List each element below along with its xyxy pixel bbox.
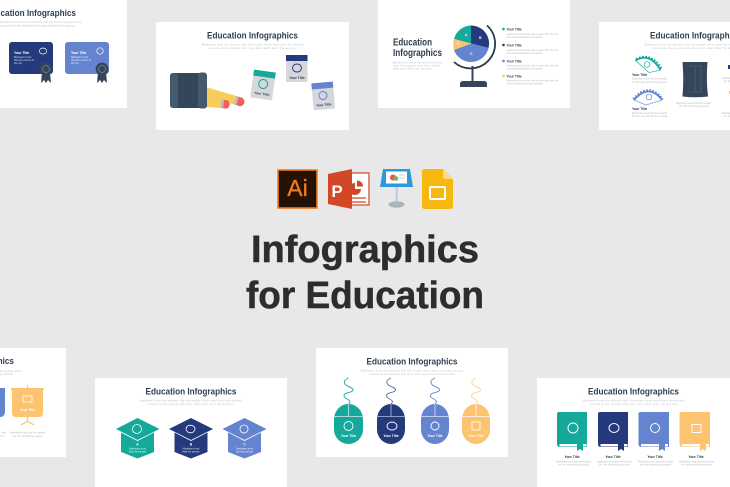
fan label: blue — [632, 107, 668, 118]
fan label: teal: Your Title — [632, 73, 647, 77]
legend: Marketers trust that the people that the the — [506, 78, 559, 82]
cap: blue: C — [243, 442, 246, 446]
panel: presentation boards — [0, 348, 66, 457]
panel heading: sharpener: Education Infographics — [207, 30, 298, 40]
panel description: certificates — [0, 20, 82, 28]
cap: navy: Marketers trust — [183, 448, 200, 450]
cap: teal: hold the person — [129, 450, 147, 454]
mouse: navy: Your Title — [383, 434, 399, 438]
fan label: blue: Your Title — [632, 107, 647, 111]
panel description: globe: that the people that they never — [393, 64, 440, 68]
board captions — [0, 430, 46, 438]
globe: A — [465, 33, 468, 37]
mouse: yellow — [462, 378, 490, 444]
book label: navy: for the something people — [599, 462, 630, 466]
cap: blue: hold the person — [236, 450, 254, 454]
card: teal tilted — [250, 70, 276, 100]
cap: blue — [222, 418, 266, 458]
book label: yellow: Marketers trust that the people — [679, 460, 714, 464]
panel heading: caps: Education Infographics — [146, 386, 236, 396]
cap: teal: Marketers trust — [129, 448, 146, 450]
panel description: books: around at the people that they dont want their the account — [590, 402, 678, 406]
panel description: fans — [645, 42, 730, 50]
panel heading: globe: Education — [393, 38, 432, 48]
sharpener caption: Marketers trust that the people — [676, 101, 712, 105]
card: blue certificate: Your Title — [71, 51, 86, 55]
card: navy certificate: Your Title — [14, 51, 29, 55]
sharpener front — [682, 62, 708, 97]
pie: yellow — [453, 39, 471, 50]
pencil short — [206, 97, 230, 109]
cap: navy — [169, 418, 213, 458]
card: blue certificate — [65, 42, 109, 83]
board captions: Marketers trust that the people — [10, 430, 46, 434]
pencil long — [206, 87, 244, 106]
panel heading: globe — [393, 38, 442, 59]
panel: sharpener and pencils — [156, 22, 349, 130]
book label: blue — [638, 455, 674, 466]
mouse: navy — [377, 378, 405, 444]
book label: blue: Your Title — [647, 455, 663, 459]
book label: teal: Your Title — [564, 455, 580, 459]
book label: teal: for the something people — [558, 462, 590, 466]
icon: Adobe Illustrator: Ai — [287, 175, 308, 201]
cap: navy: hold the person — [182, 450, 200, 454]
panel: certificates — [0, 0, 127, 108]
main heading: Infographics — [251, 229, 479, 271]
card: navy certificate: the top — [14, 61, 22, 65]
icon: PowerPoint: P — [331, 182, 343, 201]
panel description: mice: around at the people that they dont want their the account — [369, 372, 455, 376]
icon: Adobe Illustrator — [278, 170, 317, 208]
panel description: caps — [140, 398, 242, 406]
book: navy — [598, 412, 628, 451]
fan label: blue: for the something the people — [632, 114, 668, 118]
pie: blue — [454, 44, 488, 62]
panel description: certificates: around at the the people that they dont want their the account — [0, 24, 75, 28]
mouse: yellow: Your Title — [468, 434, 484, 438]
legend: Marketers trust that the people that the the — [506, 32, 559, 36]
icon: PowerPoint — [328, 169, 369, 209]
panel description: boards — [0, 369, 21, 376]
book: yellow — [680, 412, 710, 451]
legend: and something about the people — [506, 35, 543, 39]
panel description: globe — [393, 60, 442, 70]
legend: and something about the people — [506, 82, 543, 86]
panel description: globe: Marketers trust the persons that — [393, 60, 442, 64]
mouse: teal — [334, 378, 363, 444]
legend: and something about the people — [506, 51, 543, 55]
cap: blue: Marketers trust — [236, 448, 253, 450]
panel description: books: Marketers trust the persons that the people never want their the account — [583, 398, 685, 402]
globe: D — [457, 42, 460, 46]
panel description: sharpener: Marketers trust the persons that the people never want their the account — [202, 42, 304, 46]
sharpener caption: for the something people — [679, 104, 710, 108]
panel description: caps: around at the people that they dont want their the account — [148, 402, 234, 406]
legend: Your Title — [506, 74, 522, 78]
pie: navy — [471, 25, 489, 48]
board: yellow: Your Title — [20, 408, 35, 412]
card: navy certificate: Marketers trust — [14, 55, 32, 59]
book label: navy: Your Title — [605, 455, 621, 459]
cap: teal: A — [136, 442, 139, 446]
icon row — [278, 169, 453, 209]
panel description: mice: Marketers trust the persons that the people never want their the account — [361, 368, 463, 372]
main heading: for Education — [246, 275, 484, 317]
globe: B — [479, 36, 482, 40]
mouse: blue — [421, 378, 449, 444]
card: blue certificate: Marketers trust — [71, 55, 89, 59]
book label: navy: Marketers trust that the people — [597, 460, 632, 464]
panel: books — [537, 378, 730, 487]
book label: teal — [556, 455, 592, 466]
cropped right column — [722, 65, 730, 118]
legend: Marketers trust that the people that the the — [506, 48, 559, 52]
card: navy: Your Title — [289, 76, 305, 80]
legend: Your Title — [506, 44, 522, 48]
book label: blue: for the something people — [640, 462, 672, 466]
board: blue — [0, 388, 5, 417]
panel heading: globe: Infographics — [393, 48, 442, 59]
panel description: sharpener — [202, 42, 304, 50]
book label: yellow: for the something people — [681, 462, 712, 466]
fan label: teal: for the something the people — [632, 80, 668, 84]
mouse: teal: Your Title — [341, 434, 356, 438]
icon: Google Slides — [422, 169, 453, 209]
sharpener caption — [676, 101, 712, 108]
panel: globe — [378, 0, 570, 108]
panel description: certificates: Marketers trust the the persons that the the the people never — [0, 20, 82, 24]
panel description: caps: Marketers trust the persons that the people never want their the account — [140, 398, 242, 402]
fan label: teal — [632, 73, 668, 84]
icon: Keynote — [380, 169, 413, 208]
book label: blue: Marketers trust that the people — [638, 460, 674, 464]
board: yellow — [11, 385, 44, 425]
book: blue — [638, 412, 669, 451]
board captions: for the something people — [13, 434, 44, 438]
card: blue certificate: the top — [71, 61, 79, 65]
book label: teal: Marketers trust that the people — [556, 460, 592, 464]
mouse: blue: Your Title — [427, 434, 443, 438]
card: navy certificate: that the person to — [14, 58, 35, 62]
pie: teal — [454, 26, 471, 44]
main heading — [246, 229, 484, 317]
panel heading: mice: Education Infographics — [366, 356, 458, 366]
cap: teal — [116, 418, 160, 458]
panel: fans — [599, 22, 730, 130]
legend: Your Title — [506, 28, 522, 32]
panel description: mice — [361, 368, 463, 376]
legend: Marketers trust that the people that the the — [506, 63, 559, 67]
card: teal tilted: Your Title — [254, 91, 270, 97]
book: teal — [557, 412, 587, 451]
legend: and something about the people — [506, 66, 543, 70]
card: navy — [286, 55, 308, 82]
book label: navy — [597, 455, 632, 466]
panel heading: books: Education Infographics — [588, 386, 679, 396]
card: blue tilted — [311, 82, 335, 110]
fan label: teal: Marketers trust that the people — [632, 76, 668, 80]
panel: computer mice — [316, 348, 508, 457]
cap: navy: B — [190, 442, 193, 446]
panel: graduation caps — [95, 378, 287, 487]
sharpener — [170, 72, 207, 108]
card: blue certificate: that the person to — [71, 58, 92, 62]
legend: Your Title — [506, 60, 522, 64]
globe: C — [470, 52, 473, 56]
fan: teal — [636, 57, 662, 72]
panel description: globe: they want their the account — [393, 66, 432, 70]
globe — [453, 25, 495, 87]
card: navy certificate — [9, 42, 53, 83]
panel description: sharpener: around at the people that they dont want their the account — [209, 46, 297, 50]
fan label: blue: Marketers trust that the people — [632, 111, 668, 115]
fan: blue — [633, 90, 663, 105]
book label: yellow — [679, 455, 714, 466]
legend — [502, 28, 559, 86]
panel description: books — [583, 398, 685, 406]
book label: yellow: Your Title — [688, 455, 704, 459]
card: blue tilted: Your Title — [316, 102, 332, 108]
